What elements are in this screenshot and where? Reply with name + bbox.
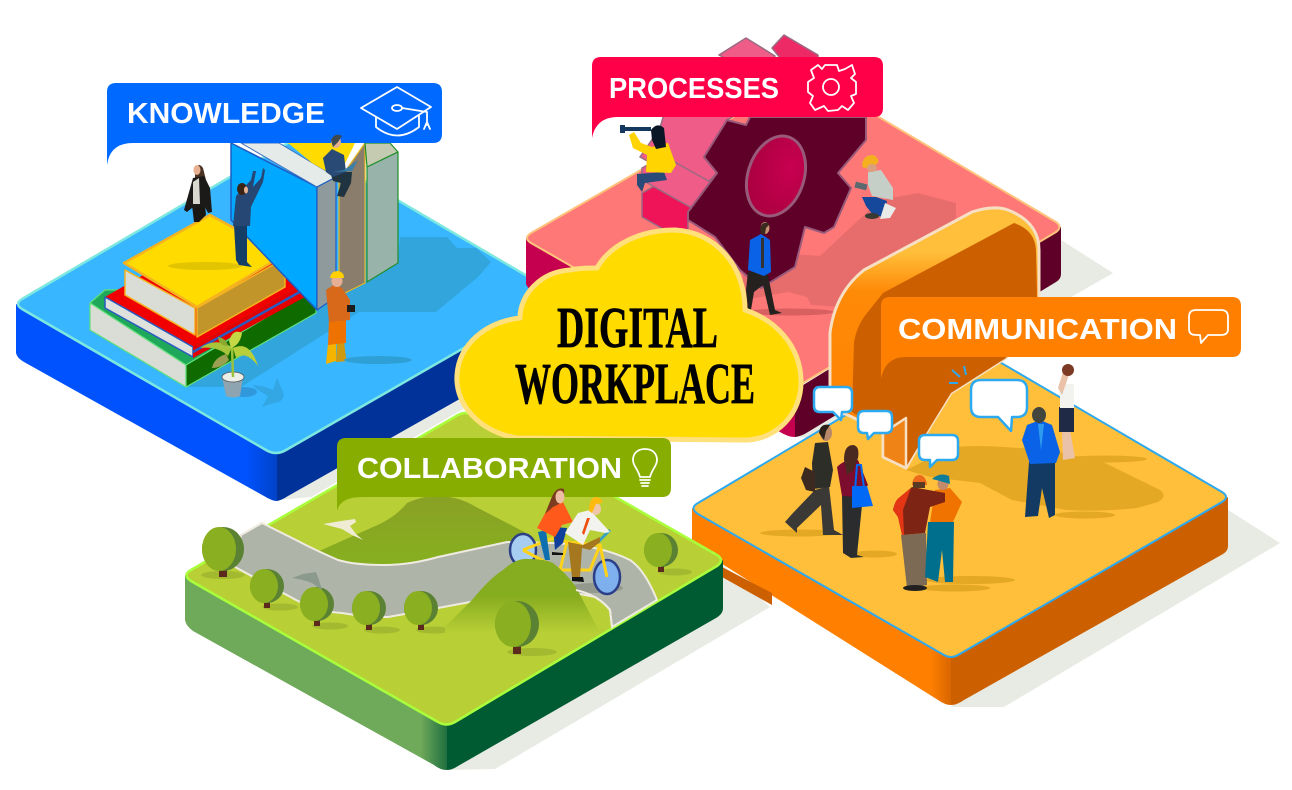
man on laptop <box>323 135 358 197</box>
tree <box>300 587 348 630</box>
yellow book <box>124 215 285 337</box>
panel: collaboration platform <box>185 413 723 770</box>
front tree <box>495 601 557 656</box>
woman with telescope <box>620 125 676 192</box>
rear wheel <box>510 534 536 566</box>
gear side <box>640 35 818 232</box>
spark lines <box>949 366 966 383</box>
man rider <box>568 537 600 577</box>
handlebar <box>597 530 610 543</box>
icon: gear <box>808 65 856 111</box>
heading: KNOWLEDGE <box>127 98 325 130</box>
man in red jacket <box>893 475 962 591</box>
platform side right <box>447 560 723 770</box>
platform side right <box>795 227 1061 437</box>
gear <box>688 117 866 288</box>
walking man <box>785 425 843 535</box>
ground shadows <box>280 240 1280 770</box>
label: communication <box>881 297 1241 379</box>
platform side left <box>526 238 795 437</box>
platform top <box>527 76 1060 389</box>
platform side right <box>277 294 557 501</box>
woman rider head <box>545 488 564 514</box>
panel: processes platform <box>526 35 1061 437</box>
title: DIGITAL <box>557 295 718 360</box>
platform top <box>18 141 554 453</box>
woman on phone <box>1058 364 1075 460</box>
man reaching up <box>233 168 265 267</box>
tree <box>404 591 452 634</box>
bird shadow <box>292 572 322 590</box>
green book <box>90 288 316 387</box>
plant in pot <box>200 332 258 398</box>
book stack <box>90 215 316 387</box>
woman with blue bag <box>837 445 873 558</box>
platform side left <box>16 304 277 501</box>
builder crouching <box>854 155 896 219</box>
label: collaboration <box>337 438 671 511</box>
bubble shadow on floor <box>906 446 1164 511</box>
cloud shape <box>457 230 801 440</box>
front wheel <box>594 560 620 594</box>
standing books <box>231 143 398 310</box>
woman in black <box>184 165 212 222</box>
tree <box>352 591 400 634</box>
platform side left <box>692 508 951 705</box>
large speech bubble 3D <box>830 208 1039 468</box>
platform top <box>186 413 721 724</box>
icon: chat bubble <box>1189 310 1228 343</box>
platform side right <box>951 497 1228 705</box>
label: processes <box>592 57 883 138</box>
red book <box>105 225 305 358</box>
bird shadow <box>252 378 284 407</box>
shadow of books <box>186 237 491 387</box>
title: WORKPLACE <box>515 351 755 416</box>
platform side left <box>185 575 447 770</box>
icon: graduation cap <box>361 87 431 136</box>
man in teal cap <box>925 475 962 582</box>
speech bubbles <box>814 366 1027 467</box>
heading: PROCESSES <box>609 73 779 105</box>
panel: communication platform <box>692 208 1228 705</box>
bubble 3 <box>919 435 958 467</box>
trees back row <box>201 527 692 634</box>
title <box>515 295 755 416</box>
frame <box>523 538 607 577</box>
tandem bicycle <box>510 497 623 594</box>
central cloud <box>457 230 801 440</box>
bubble 2 <box>858 411 892 439</box>
bubble 1 <box>814 387 852 420</box>
heading: COMMUNICATION <box>898 314 1177 346</box>
gear shadow <box>740 193 956 307</box>
man in blue jacket <box>746 222 782 315</box>
gear hole <box>737 128 815 224</box>
platform top <box>694 345 1226 657</box>
man in blue jacket with phone <box>1022 407 1060 518</box>
woman rider body <box>538 530 550 560</box>
icon: light bulb <box>633 449 657 486</box>
panel: knowledge platform <box>16 141 557 501</box>
tree <box>250 569 298 610</box>
back hill <box>317 496 526 568</box>
road <box>235 523 657 627</box>
bubble 4 <box>971 380 1027 431</box>
floor shadows <box>760 456 1147 592</box>
front hill <box>445 559 600 633</box>
side strip <box>722 567 772 605</box>
bird <box>323 519 363 540</box>
heading: COLLABORATION <box>357 453 622 485</box>
label: knowledge <box>107 83 442 165</box>
tree <box>644 533 692 576</box>
tree <box>201 527 245 579</box>
worker in orange <box>326 271 412 364</box>
